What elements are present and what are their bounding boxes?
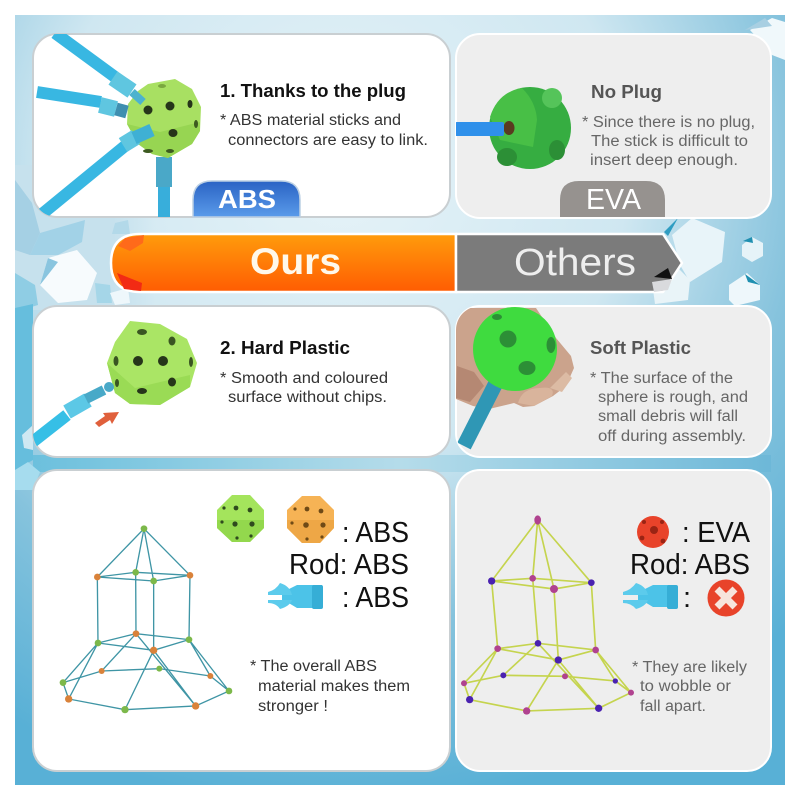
description: off during assembly. [598, 428, 746, 445]
heading: Soft Plastic [590, 338, 691, 358]
heading: 1. Thanks to the plug [220, 80, 406, 101]
description: The stick is difficult to [591, 133, 748, 150]
material list: Rod: ABS [289, 549, 409, 581]
panel: others, no plug [455, 34, 771, 218]
material list [630, 517, 751, 614]
description: connectors are easy to link. [228, 132, 428, 149]
icon: blue connector [623, 583, 678, 609]
description: sphere is rough, and [598, 389, 748, 406]
panel: ours, materials [33, 470, 450, 771]
description [590, 370, 748, 445]
illustration: stick in EVA ball [455, 87, 571, 169]
material list: : ABS [342, 582, 409, 614]
note: to wobble or [640, 678, 731, 695]
note: * The overall ABS [250, 658, 377, 675]
material list: : EVA [682, 517, 751, 549]
description: surface without chips. [228, 389, 387, 406]
description [220, 370, 388, 406]
illustration: hand squeezing soft ball [456, 307, 574, 446]
note: material makes them [258, 678, 410, 695]
note: fall apart. [640, 698, 706, 715]
heading: 2. Hard Plastic [220, 337, 350, 358]
description: * ABS material sticks and [220, 112, 401, 129]
description: * The surface of the [590, 370, 733, 387]
icon: orange ABS ball [287, 496, 334, 543]
panel: others, materials [456, 470, 771, 771]
description [582, 114, 755, 169]
icon: green ABS ball [217, 495, 264, 542]
description [220, 112, 428, 149]
icon: arrow [95, 412, 119, 427]
note [250, 658, 410, 715]
chart: ABS fort frame [60, 525, 232, 713]
label: ours: Ours [250, 241, 341, 282]
tab: ABS [193, 181, 300, 217]
description: * Smooth and coloured [220, 370, 388, 387]
panel: others, soft plastic [456, 306, 771, 457]
icon: red EVA ball [637, 516, 669, 548]
note: stronger ! [258, 698, 328, 715]
banner: ours vs others [111, 234, 682, 292]
illustration: hard ABS ball and plug [30, 321, 197, 444]
material list: Rod: ABS [630, 549, 750, 581]
icon: red cross [708, 580, 744, 616]
description: * Since there is no plug, [582, 114, 755, 131]
heading: No Plug [591, 82, 662, 102]
note: * They are likely [632, 659, 747, 676]
note [632, 659, 747, 715]
chart: EVA fort frame [461, 515, 634, 715]
material list: : [683, 582, 691, 614]
tab: ABS: ABS [218, 184, 276, 214]
panel: ours, hard plastic [30, 306, 450, 457]
illustration: sticks linked to ABS ball [37, 33, 201, 217]
icon: blue connector [268, 583, 323, 609]
description: insert deep enough. [590, 152, 738, 169]
description: small debris will fall [598, 408, 738, 425]
tab: EVA [560, 181, 665, 217]
panel: ours, plug [33, 33, 450, 217]
label: others: Others [514, 242, 636, 284]
tab: EVA: EVA [586, 184, 642, 216]
material list [289, 517, 409, 614]
material list: : ABS [342, 517, 409, 549]
